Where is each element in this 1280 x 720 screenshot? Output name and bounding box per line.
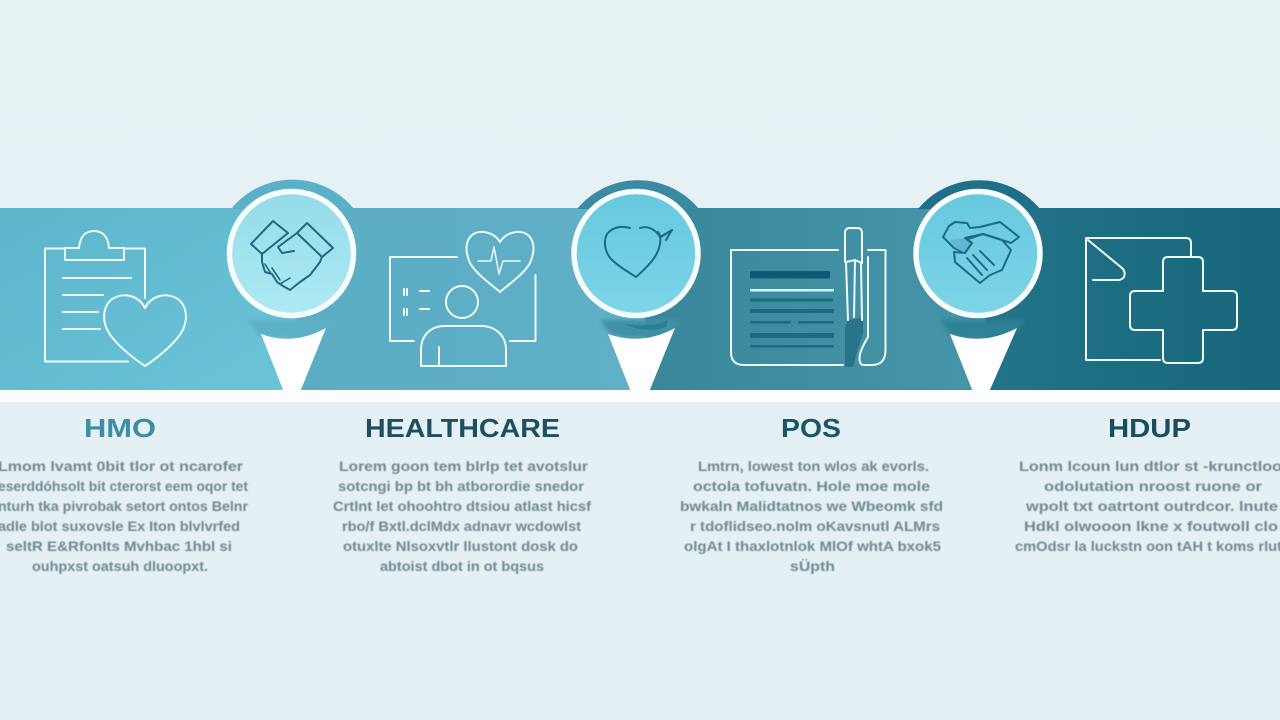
document title bar [750, 271, 830, 278]
upper hand [943, 222, 1019, 253]
icon: patient with heart monitor [390, 232, 536, 366]
white strip under banner [0, 390, 1280, 402]
circle marker 3: filled handshake [916, 192, 1040, 316]
body text: Lonm lcoun lun dtlor st -krunctloo [1019, 458, 1280, 474]
fingers [967, 251, 994, 275]
body text: otuxlte Nlsoxvtlr llustont dosk do [343, 538, 578, 554]
panel: segment 4 band [975, 208, 1280, 390]
body text: octola tofuvatn. Hole moe mole [693, 478, 930, 494]
icon: document with pen [731, 228, 886, 367]
column 2: HEALTHCARE [333, 413, 591, 574]
icon: filled handshake [943, 222, 1019, 283]
body text: r tdoflidseo.nolm oKavsnutl ALMrs [690, 518, 940, 534]
heading: HMO [84, 413, 156, 443]
body text [680, 458, 943, 574]
body text: cmOdsr la luckstn oon tAH t koms rlut [1015, 538, 1280, 554]
marker 3 lower shadow [940, 320, 1025, 339]
marker 2 lower shadow [600, 320, 680, 339]
icon: clipboard with heart [45, 231, 186, 366]
body text: Lmtrn, lowest ton wlos ak evorls. [698, 458, 929, 474]
body text: eserddóhsolt bit cterorst eem oqor tet [0, 478, 248, 494]
body text: sÜpth [790, 558, 835, 574]
marker 1 top cap [231, 180, 354, 209]
panel: segment 1 band [0, 208, 300, 390]
body text: wpolt txt oatrtont outrdcor. lnute [1025, 498, 1278, 514]
marker 2 top cap [577, 180, 699, 209]
marker 2 dark crescent [625, 320, 668, 330]
body text: rbo/f Bxtl.dclMdx adnavr wcdowlst [342, 518, 581, 534]
body text: adle blot suxovsle Ex Iton blvlvrfed [0, 518, 240, 534]
icon: document with medical cross [1086, 238, 1237, 363]
body text: olgAt I thaxlotnlok MlOf whtA bxok5 [684, 538, 941, 554]
circle marker 2: heart [574, 192, 698, 316]
pen [845, 228, 863, 367]
column 3: POS [680, 413, 943, 574]
body text: odolutation nroost ruone or [1044, 478, 1263, 494]
circle [574, 192, 698, 316]
body text: sotcngi bp bt bh atborordie snedor [338, 478, 585, 494]
lower hand [954, 234, 1011, 283]
column 1: HMO [0, 413, 249, 574]
pointer 3 [950, 328, 1017, 392]
heading: POS [781, 413, 841, 443]
circle [230, 192, 354, 316]
pointer 1 [261, 328, 326, 392]
panel: segment 2 band [287, 208, 649, 390]
body text [333, 458, 591, 574]
icon: heart [605, 227, 672, 277]
heading: HDUP [1108, 413, 1191, 443]
body text: ouhpxst oatsuh dluoopxt. [32, 558, 208, 574]
marker 1 lower shadow [248, 320, 338, 339]
pointer 2 [608, 328, 675, 392]
banner [0, 180, 1280, 392]
icon: handshake outline [251, 221, 333, 290]
body text: Crtlnt let ohoohtro dtsiou atlast hicsf [333, 498, 591, 514]
body text [0, 458, 249, 574]
marker 3 top cap [918, 180, 1040, 209]
document text lines [750, 289, 834, 348]
body text: Lmom lvamt 0bit tlor ot ncarofer [0, 458, 244, 474]
body text: Hdkl olwooon lkne x foutwoll clo [1024, 518, 1278, 534]
circle marker 1: handshake [230, 192, 354, 316]
circle [916, 192, 1040, 316]
body text: bwkaln Malidtatnos we Wbeomk sfd [680, 498, 943, 514]
body text: nturh tka pivrobak setort ontos Belnr [0, 498, 249, 514]
body text [1015, 458, 1280, 554]
body text: seltR E&RfonIts Mvhbac 1hbl si [6, 538, 232, 554]
panel: segment 3 band [634, 208, 989, 390]
body text: abtoist dbot in ot bqsus [380, 558, 544, 574]
shaded palm [950, 238, 972, 253]
heading: HEALTHCARE [365, 413, 560, 443]
document outline [731, 250, 886, 365]
column 4: HDUP [1015, 413, 1280, 554]
body text: Lorem goon tem blrlp tet avotslur [339, 458, 589, 474]
